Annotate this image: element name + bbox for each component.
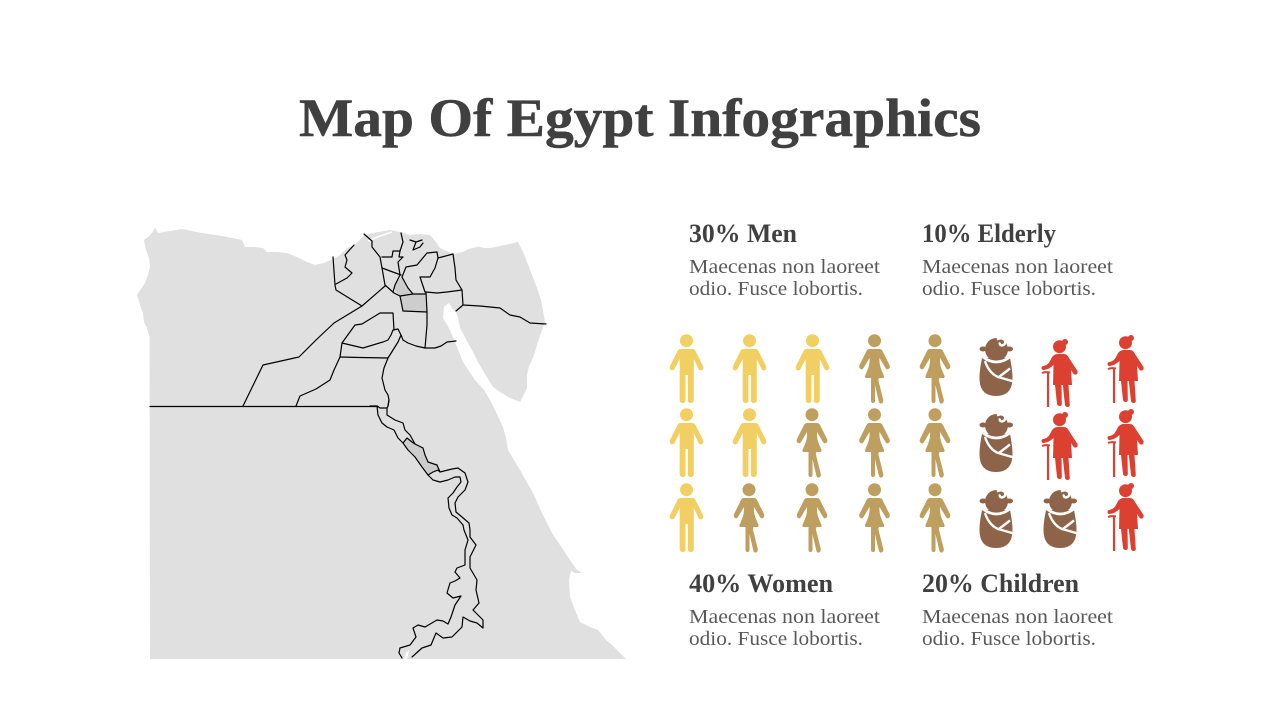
stat: 20% Children: Maecenas non laoreet xyxy=(922,607,1114,628)
stat: 30% Men: Maecenas non laoreet xyxy=(689,257,881,278)
stat: 10% Elderly xyxy=(922,219,1114,300)
map: coast streaks xyxy=(368,232,478,253)
map of Egypt xyxy=(137,227,626,659)
stat: 10% Elderly: Maecenas non laoreet xyxy=(922,257,1114,278)
stat: 20% Children: odio. Fusce lobortis. xyxy=(922,629,1096,650)
icons: men xyxy=(670,334,829,552)
map: highlighted governorates xyxy=(393,277,440,475)
title: Map Of Egypt Infographics xyxy=(299,88,981,148)
icons: children xyxy=(980,338,1078,548)
stat: 20% Children xyxy=(922,569,1114,650)
map: white gap at southern edge xyxy=(404,650,409,659)
stat: 40% Women xyxy=(689,569,881,650)
stat: 10% Elderly: odio. Fusce lobortis. xyxy=(922,279,1096,300)
map: governorate borders xyxy=(150,233,546,658)
stat: 20% Children: 20% Children xyxy=(922,569,1080,598)
icons: women xyxy=(734,334,950,553)
icons: elderly xyxy=(1042,335,1144,551)
pictogram grid: population xyxy=(670,334,1144,553)
map: Nile west bank xyxy=(370,406,468,658)
stat: 40% Women: 40% Women xyxy=(689,569,834,598)
stat: 10% Elderly: 10% Elderly xyxy=(922,219,1056,248)
stat: 30% Men: 30% Men xyxy=(689,219,798,248)
stat: 40% Women: Maecenas non laoreet xyxy=(689,607,881,628)
stat: 40% Women: odio. Fusce lobortis. xyxy=(689,629,863,650)
stat: 30% Men: odio. Fusce lobortis. xyxy=(689,279,863,300)
map: land silhouette xyxy=(137,227,626,659)
map: Nile east bank xyxy=(387,400,483,657)
stat: 30% Men xyxy=(689,219,881,300)
